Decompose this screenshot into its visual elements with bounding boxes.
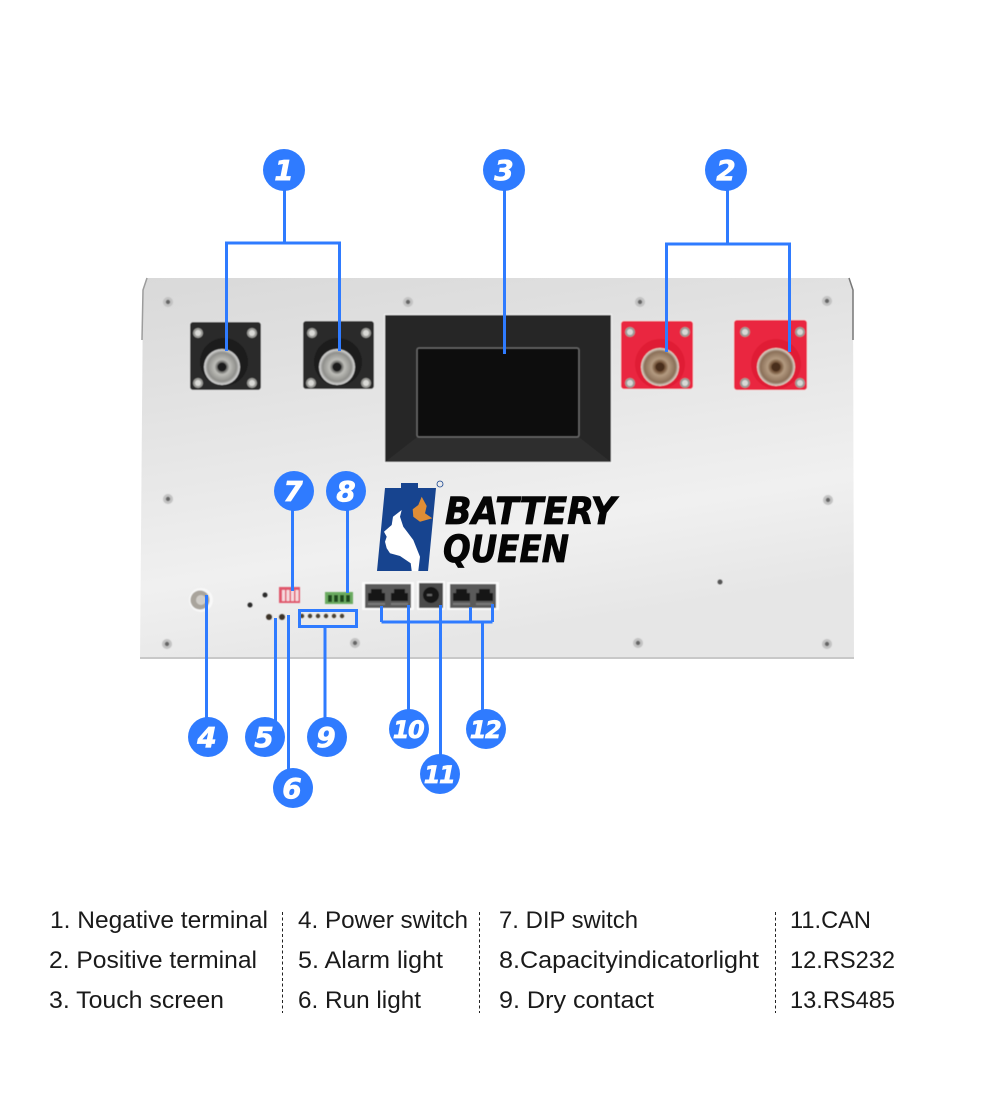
- callout 8: [326, 471, 366, 593]
- logo wordmark: BATTERY: [445, 490, 619, 533]
- legend column 1: 2. Positive terminal: [49, 947, 257, 974]
- legend column 1: 3. Touch screen: [49, 987, 224, 1014]
- callout 4: [188, 595, 228, 757]
- callout 5: [245, 618, 285, 757]
- legend column 3: 8.Capacityindicatorlight: [499, 947, 759, 974]
- positive terminal right: [734, 320, 808, 390]
- legend column 2: 4. Power switch: [298, 907, 468, 934]
- legend column 4: 12.RS232: [790, 947, 895, 974]
- callout 3: 3: [494, 154, 514, 187]
- legend column 4: [790, 907, 895, 1014]
- negative terminal left: [190, 322, 262, 390]
- port: middle: [417, 581, 445, 610]
- callout 1: [226, 149, 340, 351]
- ports: CAN and RS232: [362, 582, 414, 610]
- callout 6: 6: [282, 772, 302, 805]
- callout 10: 10: [393, 716, 424, 744]
- callout 2: 2: [716, 154, 736, 187]
- power switch: [189, 588, 213, 612]
- logo mark: [377, 481, 443, 571]
- negative terminal right: [302, 320, 374, 390]
- positive terminal left: [620, 320, 694, 390]
- callout 7: 7: [283, 475, 303, 508]
- panel: battery front plate: [140, 278, 854, 659]
- DIP switch: [279, 587, 300, 603]
- callout 9: 9: [316, 721, 336, 754]
- callout 8: 8: [336, 475, 356, 508]
- callout 11: [420, 605, 460, 794]
- legend column 4: 11.CAN: [790, 907, 871, 934]
- callout 2: [666, 149, 790, 352]
- callout 6: [273, 615, 313, 808]
- callout 11: 11: [424, 761, 454, 789]
- callout 9: [300, 610, 356, 757]
- legend column 1: 1. Negative terminal: [50, 907, 268, 934]
- logo wordmark: QUEEN: [443, 528, 569, 571]
- callout 12: [382, 604, 506, 749]
- capacity indicator connector: [325, 592, 353, 604]
- legend column 3: 7. DIP switch: [499, 907, 638, 934]
- logo wordmark: [443, 490, 619, 571]
- legend column 3: [499, 907, 759, 1014]
- callout 7: [274, 471, 314, 591]
- legend column 2: [298, 907, 468, 1014]
- legend column 2: 5. Alarm light: [298, 947, 443, 974]
- ports: RS485: [447, 582, 499, 610]
- legend column 4: 13.RS485: [790, 987, 895, 1014]
- legend column 2: 6. Run light: [298, 987, 421, 1014]
- callout 3: [483, 149, 525, 354]
- callout 5: 5: [254, 721, 274, 754]
- callout 12: 12: [470, 716, 501, 744]
- legend column 1: [49, 907, 268, 1014]
- touch screen: [384, 314, 612, 463]
- callout 10: [382, 605, 429, 749]
- callout 4: 4: [196, 721, 217, 754]
- callout 1: 1: [274, 154, 294, 187]
- indicator holes: [248, 592, 344, 620]
- legend column 3: 9. Dry contact: [499, 987, 654, 1014]
